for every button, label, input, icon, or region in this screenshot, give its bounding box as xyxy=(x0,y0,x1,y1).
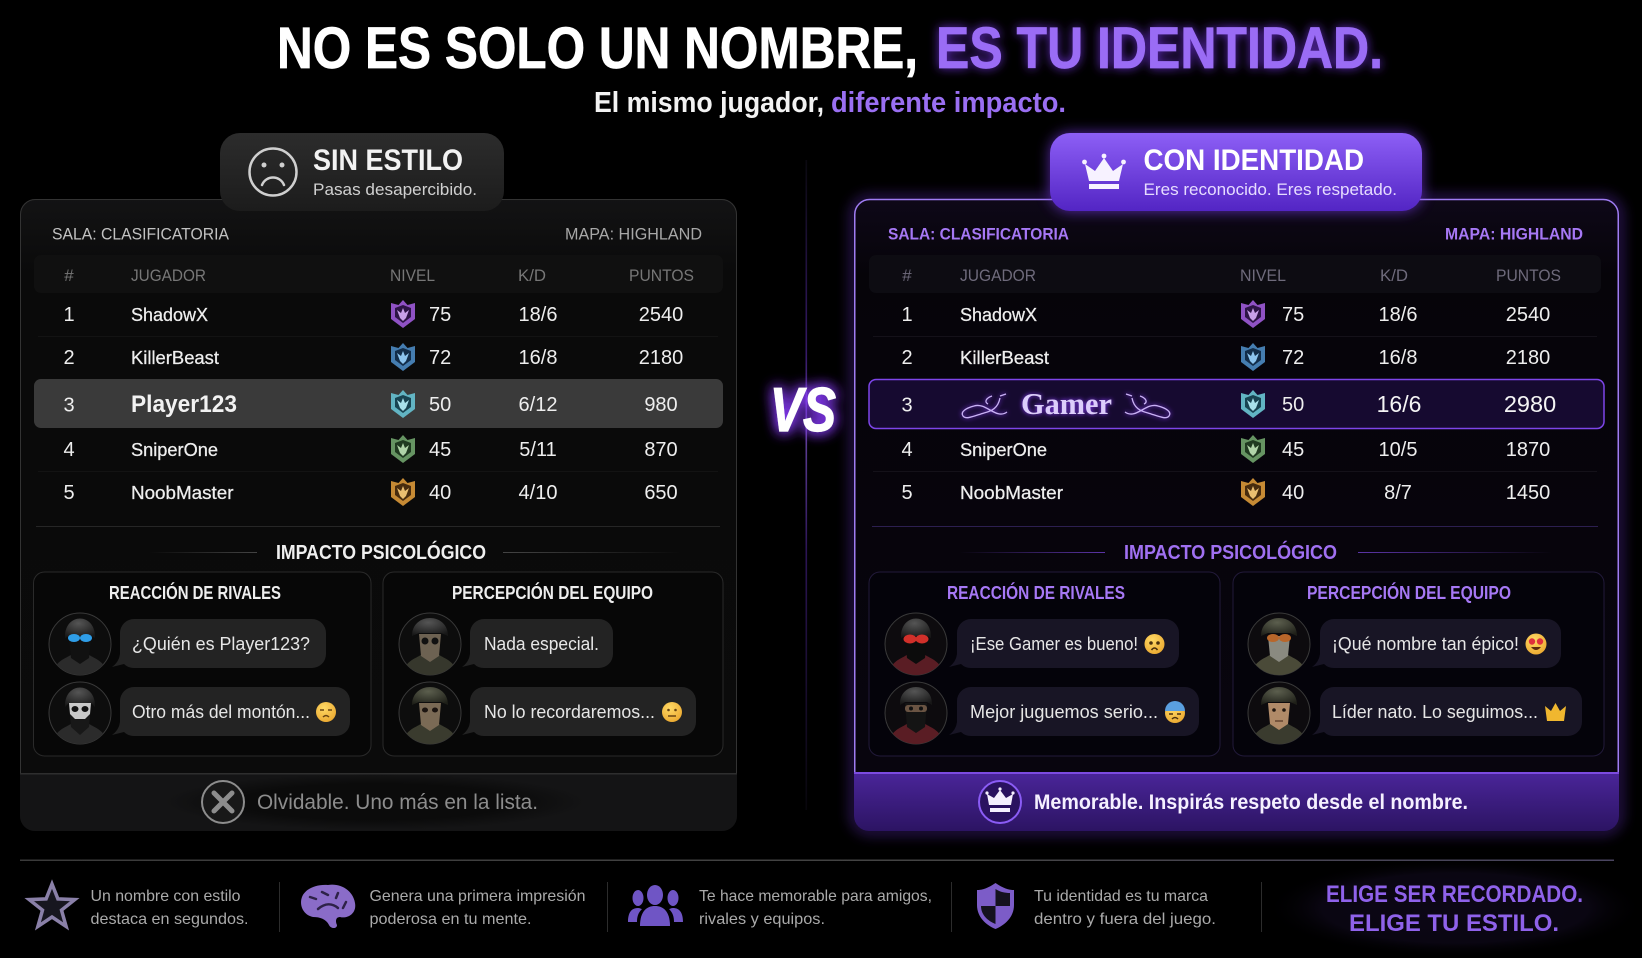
table header: JUGADOR xyxy=(131,266,206,285)
emoji: cold sweat xyxy=(1165,701,1185,723)
benefit: memorable xyxy=(628,885,932,928)
row 5: NoobMaster xyxy=(131,482,234,503)
speech bubble xyxy=(112,619,326,668)
row 4: SniperOne xyxy=(960,439,1047,460)
row 1 xyxy=(63,300,683,328)
avatar: young soldier xyxy=(1248,682,1310,745)
row 3 highlighted: player123: 6/12 xyxy=(519,394,557,416)
speech bubble xyxy=(462,619,613,668)
badge: gold xyxy=(391,478,415,506)
row 5: NoobMaster xyxy=(960,482,1063,503)
benefit: primera impresion xyxy=(301,885,586,928)
row 3 highlighted: gamer: 2980 xyxy=(1504,391,1556,417)
row 1: 1 xyxy=(63,304,75,326)
heading: impacto psicologico: IMPACTO PSICOLÓGICO xyxy=(1124,540,1337,564)
speech bubble: Otro más del montón... xyxy=(132,702,310,722)
speech bubble xyxy=(1312,619,1561,668)
table header: # xyxy=(64,266,74,285)
benefit: identidad xyxy=(977,883,1216,929)
speech bubble: ¿Quién es Player123? xyxy=(132,634,310,654)
emoji: crown xyxy=(1545,703,1566,721)
card: reaccion de rivales xyxy=(34,572,371,756)
speech bubble xyxy=(462,687,696,736)
avatar: soldier with helmet xyxy=(399,682,461,745)
badge: purple xyxy=(1241,300,1265,328)
room info xyxy=(52,224,702,244)
row 5: 40 xyxy=(1282,482,1304,504)
icon: sad face xyxy=(250,148,296,196)
panel background xyxy=(20,199,737,831)
verdict footer: memorable xyxy=(854,772,1619,831)
speech bubble xyxy=(1312,687,1582,736)
avatar: pale mask soldier xyxy=(399,613,461,676)
icon: shield xyxy=(977,883,1014,929)
emoji: sleepy xyxy=(316,702,336,722)
card: reaccion de rivales xyxy=(869,572,1220,756)
table header xyxy=(869,255,1601,293)
room info: SALA: CLASIFICATORIA xyxy=(888,224,1069,244)
row 1: 18/6 xyxy=(1379,304,1417,326)
card: reaccion de rivales: REACCIÓN DE RIVALES xyxy=(947,582,1125,603)
benefit: memorable: Te hace memorable para amigos, xyxy=(699,888,932,905)
row 1: 18/6 xyxy=(519,304,557,326)
row 3 highlighted: player123: 980 xyxy=(644,394,678,416)
verdict footer: olvidable: Olvidable. Uno más en la lista. xyxy=(257,791,538,814)
table header: JUGADOR xyxy=(960,266,1036,285)
row 2: 72 xyxy=(429,347,451,369)
emoji: anxious xyxy=(1144,634,1164,654)
row 3 highlighted: player123: 3 xyxy=(63,394,75,416)
row 4 xyxy=(901,435,1550,463)
emoji: neutral xyxy=(662,702,682,722)
table header: K/D xyxy=(518,266,546,285)
pill: con identidad xyxy=(1050,133,1422,211)
speech bubble: ¡Ese Gamer es bueno! xyxy=(970,634,1138,654)
table header: NIVEL xyxy=(1240,266,1286,285)
table header: PUNTOS xyxy=(629,266,694,285)
row 4 xyxy=(63,435,678,463)
speech bubble xyxy=(949,687,1199,736)
row 5: 8/7 xyxy=(1384,482,1412,504)
benefit: nombre con estilo: destaca en segundos. xyxy=(90,911,248,928)
ornament: right flourish xyxy=(1125,394,1170,418)
row 4: 4 xyxy=(63,439,75,461)
row 3 highlighted: gamer: 3 xyxy=(901,394,913,416)
icon: x circle xyxy=(202,781,244,823)
pill: con identidad: Eres reconocido. Eres respetado. xyxy=(1144,180,1397,199)
row 4: 5/11 xyxy=(519,439,557,461)
room info xyxy=(888,224,1583,244)
table header: PUNTOS xyxy=(1496,266,1561,285)
benefit: nombre con estilo xyxy=(29,884,249,928)
table header xyxy=(34,255,723,293)
row 4: 10/5 xyxy=(1379,439,1417,461)
badge: purple xyxy=(391,300,415,328)
room info: SALA: CLASIFICATORIA xyxy=(52,224,230,244)
row 5: 5 xyxy=(901,482,913,504)
row 4: 45 xyxy=(429,439,451,461)
row 1: 75 xyxy=(429,304,451,326)
row 1: 2540 xyxy=(639,304,683,326)
benefit: primera impresion: Genera una primera impresión xyxy=(370,888,586,905)
row 1 xyxy=(901,300,1550,328)
row 2: 2 xyxy=(901,347,913,369)
panel glow xyxy=(854,200,1618,830)
row 4: 45 xyxy=(1282,439,1304,461)
row 3 highlighted: player123 xyxy=(34,379,723,428)
room info: MAPA: HIGHLAND xyxy=(565,224,702,244)
badge: blue xyxy=(391,343,415,371)
row 2 xyxy=(63,343,683,371)
row 1: 75 xyxy=(1282,304,1304,326)
row 5: 650 xyxy=(644,482,678,504)
badge: teal xyxy=(391,390,415,418)
row 1: ShadowX xyxy=(131,304,208,325)
bottom strip xyxy=(20,858,1642,958)
badge: blue xyxy=(1241,343,1265,371)
icon: crown xyxy=(1082,154,1126,189)
ornament: left flourish xyxy=(962,394,1007,418)
row 4: 4 xyxy=(901,439,913,461)
table header: NIVEL xyxy=(390,266,435,285)
row 2 xyxy=(901,343,1550,371)
row 4: 870 xyxy=(644,439,678,461)
verdict footer: olvidable xyxy=(20,773,737,831)
badge: teal xyxy=(1241,390,1265,418)
row 5 xyxy=(901,478,1550,506)
subtitle: diferente impacto. xyxy=(831,87,1066,119)
table header: # xyxy=(902,266,912,285)
icon: brain xyxy=(301,885,355,928)
panel background xyxy=(854,199,1619,831)
avatar: goggles soldier xyxy=(1248,613,1310,676)
emoji: heart eyes xyxy=(1526,634,1546,654)
pill: sin estilo: Pasas desapercibido. xyxy=(313,180,477,199)
speech bubble xyxy=(949,619,1179,668)
row 3 highlighted: gamer: 50 xyxy=(1282,394,1304,416)
benefit: memorable: rivales y equipos. xyxy=(699,911,825,928)
row 5: 40 xyxy=(429,482,451,504)
panel: sin estilo xyxy=(20,199,737,831)
row 2: 16/8 xyxy=(519,347,557,369)
call to action: ELIGE TU ESTILO. xyxy=(1349,910,1559,937)
table header: K/D xyxy=(1380,266,1408,285)
vs divider line xyxy=(806,160,807,810)
card: percepcion del equipo xyxy=(1233,572,1604,756)
heading: impacto psicologico: IMPACTO PSICOLÓGICO xyxy=(276,540,486,564)
row 3 highlighted: gamer: 16/6 xyxy=(1377,391,1421,417)
subtitle xyxy=(594,87,1066,119)
icon: people xyxy=(628,885,683,926)
speech bubble: No lo recordaremos... xyxy=(484,702,655,722)
title xyxy=(277,16,1383,81)
row 4: 1870 xyxy=(1506,439,1550,461)
row 3 highlighted: player123: Player123 xyxy=(131,391,237,418)
card: percepcion del equipo: PERCEPCIÓN DEL EQUIPO xyxy=(1307,582,1511,603)
row 1: ShadowX xyxy=(960,304,1037,325)
row 2: 72 xyxy=(1282,347,1304,369)
row 2: 2180 xyxy=(1506,347,1550,369)
row 3 highlighted: gamer xyxy=(869,380,1604,428)
card: percepcion del equipo xyxy=(383,572,723,756)
avatar: skull mask xyxy=(49,682,111,745)
panel: con identidad xyxy=(854,199,1619,831)
icon: star xyxy=(29,884,75,926)
call to action: ELIGE SER RECORDADO. xyxy=(1326,881,1583,908)
benefit: nombre con estilo: Un nombre con estilo xyxy=(90,888,241,905)
row 4: SniperOne xyxy=(131,439,218,460)
speech bubble: ¡Qué nombre tan épico! xyxy=(1332,634,1519,654)
row 2: 16/8 xyxy=(1379,347,1417,369)
row 1: 2540 xyxy=(1506,304,1550,326)
pill: sin estilo: SIN ESTILO xyxy=(313,144,463,177)
badge: green xyxy=(1241,435,1265,463)
card: reaccion de rivales: REACCIÓN DE RIVALES xyxy=(109,582,281,603)
title: ES TU IDENTIDAD. xyxy=(936,16,1383,81)
VS badge: VS xyxy=(770,376,836,445)
row 2: 2 xyxy=(63,347,75,369)
row 2: KillerBeast xyxy=(131,347,219,368)
card: percepcion del equipo: PERCEPCIÓN DEL EQUIPO xyxy=(452,582,653,603)
speech bubble: Líder nato. Lo seguimos... xyxy=(1332,702,1538,722)
row 2: 2180 xyxy=(639,347,683,369)
row 3 highlighted: player123: 50 xyxy=(429,394,451,416)
room info: MAPA: HIGHLAND xyxy=(1445,224,1583,244)
speech bubble: Mejor juguemos serio... xyxy=(970,702,1158,722)
title: NO ES SOLO UN NOMBRE, xyxy=(277,16,918,81)
icon: crown badge xyxy=(979,781,1021,823)
pill: con identidad: CON IDENTIDAD xyxy=(1144,144,1364,177)
call to action xyxy=(1326,881,1583,937)
pill: sin estilo xyxy=(220,133,504,211)
row 5 xyxy=(63,478,678,506)
benefit: identidad: dentro y fuera del juego. xyxy=(1034,911,1216,928)
avatar: dark mask red jacket xyxy=(885,682,947,745)
row 5: 5 xyxy=(63,482,75,504)
row 2: KillerBeast xyxy=(960,347,1049,368)
subtitle: El mismo jugador, xyxy=(594,87,824,119)
row 5: 4/10 xyxy=(519,482,557,504)
speech bubble xyxy=(112,687,350,736)
avatar: red visor xyxy=(885,613,947,676)
benefit: identidad: Tu identidad es tu marca xyxy=(1034,888,1208,905)
row 5: 1450 xyxy=(1506,482,1550,504)
badge: green xyxy=(391,435,415,463)
speech bubble: Nada especial. xyxy=(484,634,599,654)
row 3 highlighted: gamer: Gamer xyxy=(1021,386,1112,421)
verdict footer: memorable: Memorable. Inspirás respeto desde el nombre. xyxy=(1034,791,1468,814)
benefit: primera impresion: poderosa en tu mente. xyxy=(370,911,532,928)
row 1: 1 xyxy=(901,304,913,326)
badge: gold xyxy=(1241,478,1265,506)
avatar: blue visor xyxy=(49,613,111,676)
